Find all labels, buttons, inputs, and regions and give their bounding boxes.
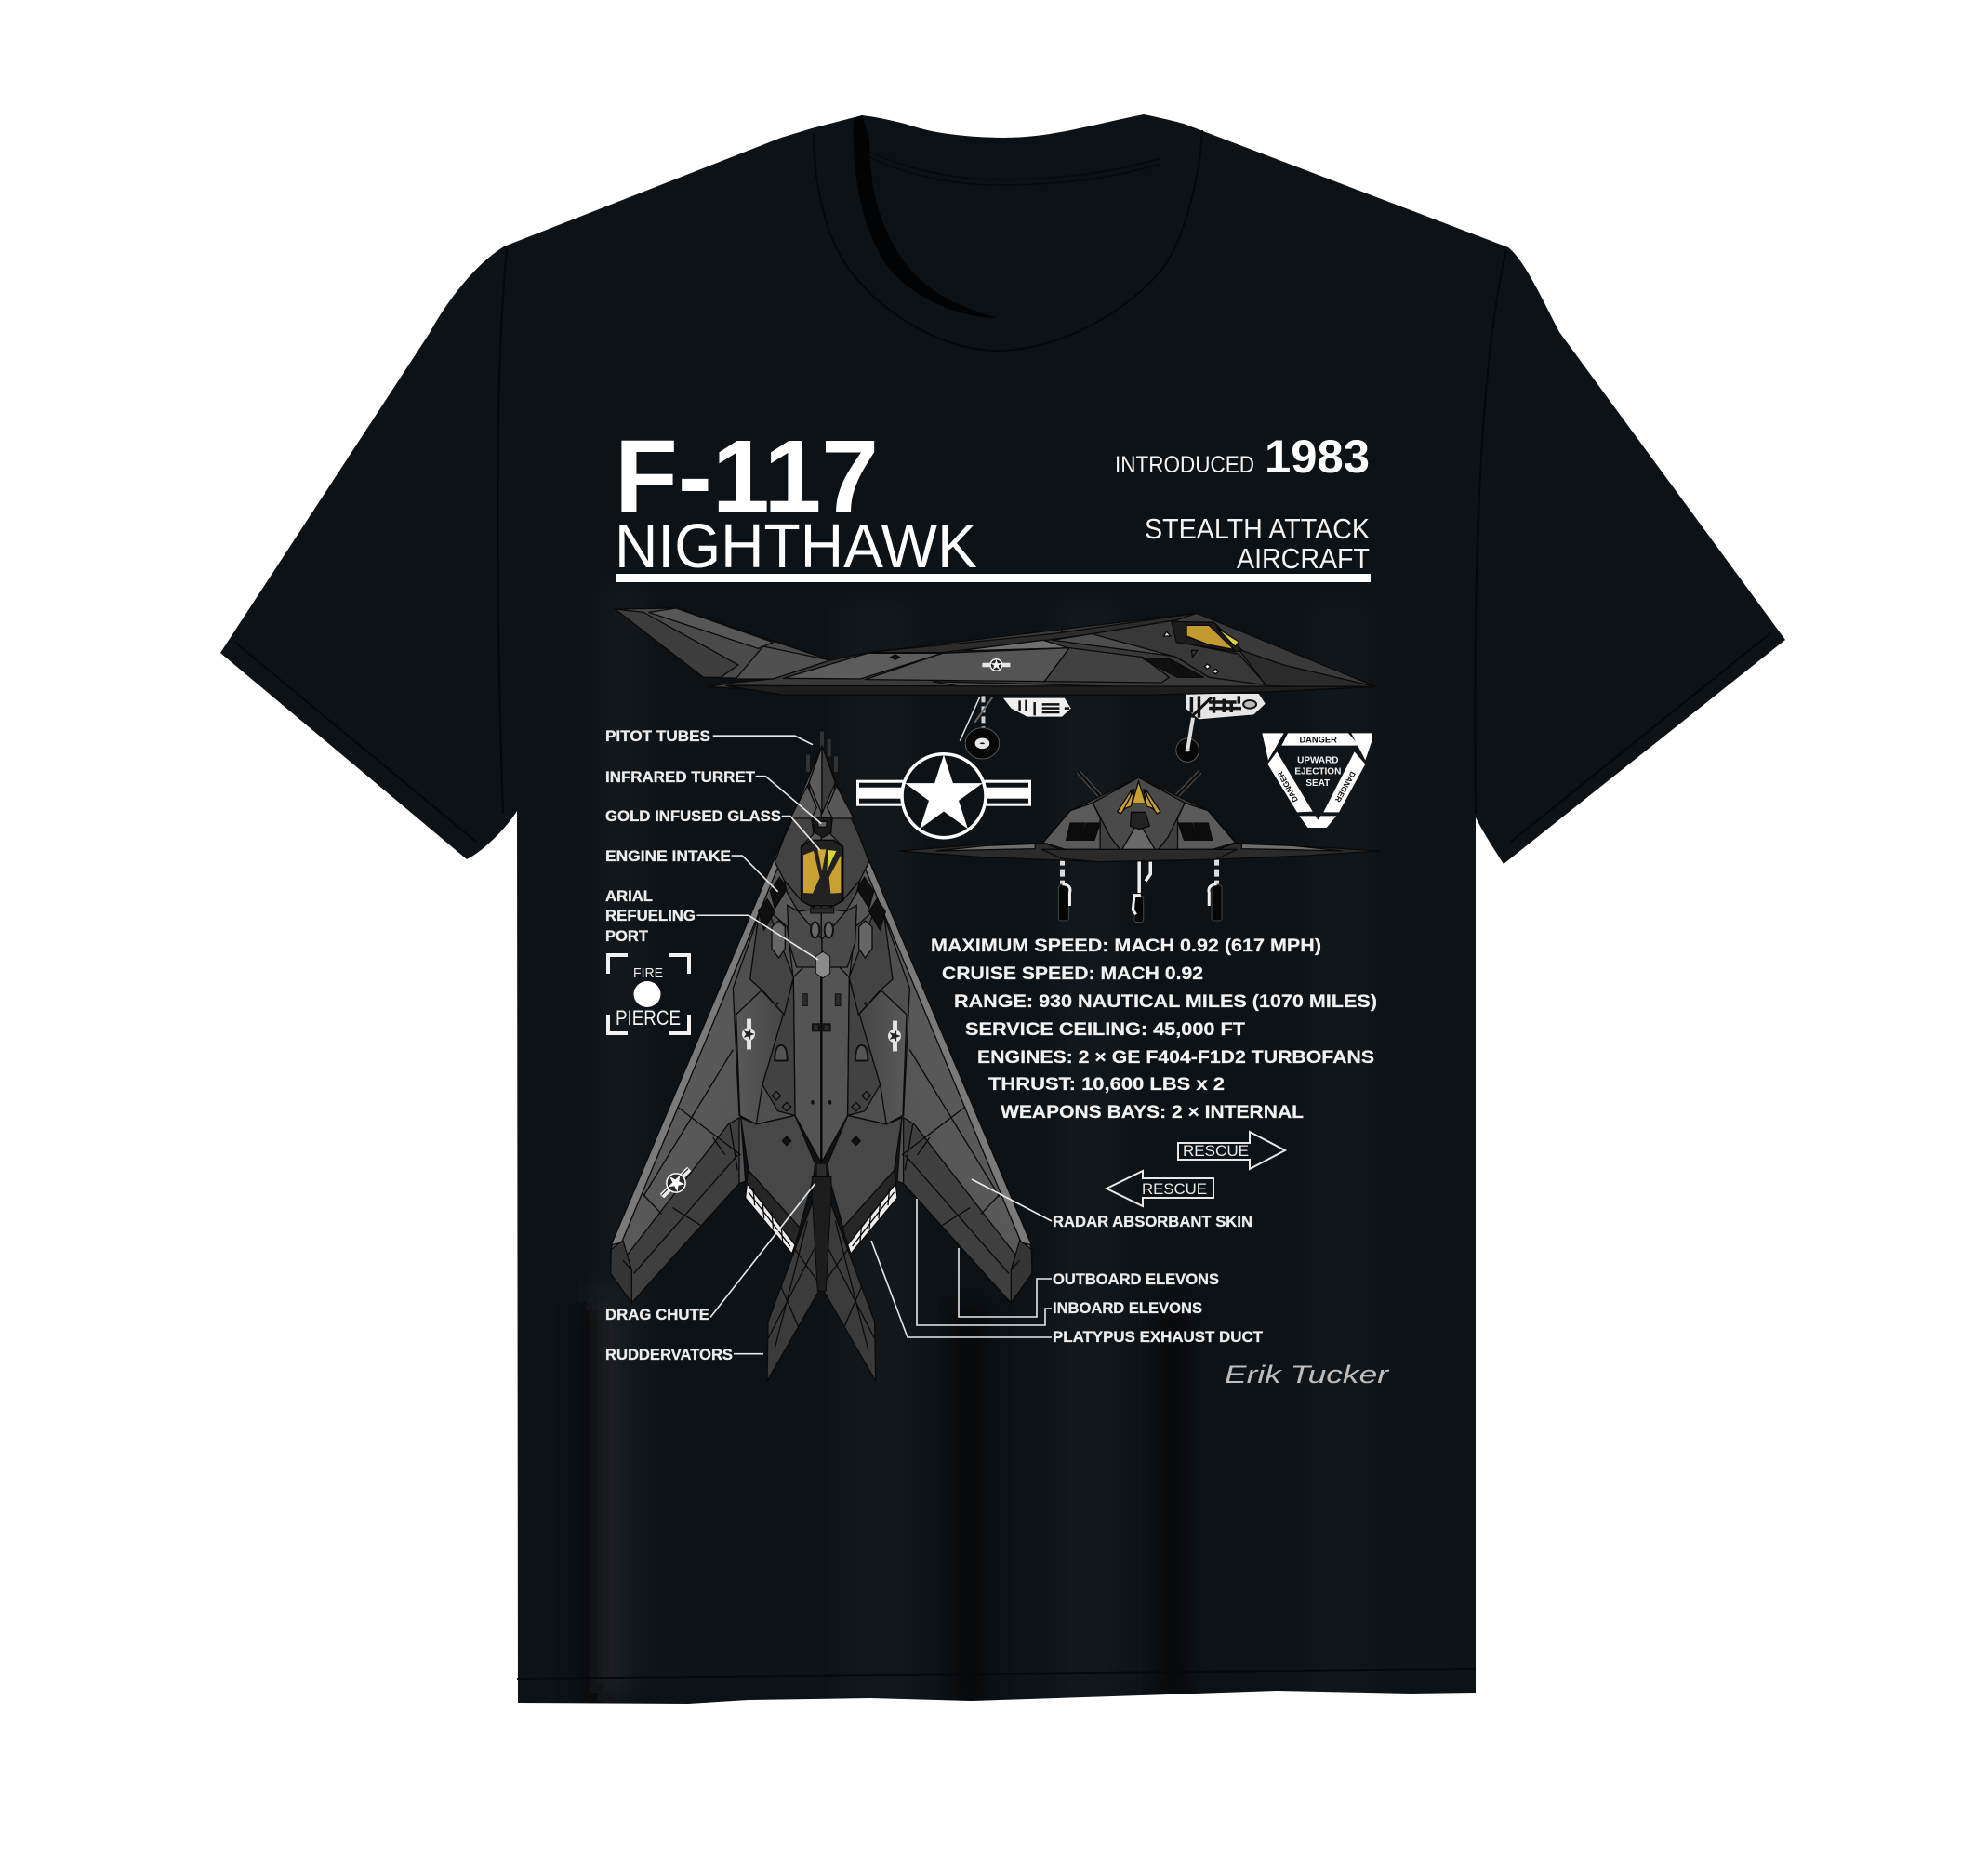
subtitle: STEALTH ATTACK: [1145, 512, 1370, 545]
subtitle: AIRCRAFT: [1237, 542, 1370, 575]
callout labels: right: INBOARD ELEVONS: [1053, 1299, 1202, 1317]
title: NIGHTHAWK: NIGHTHAWK: [615, 512, 977, 581]
callout labels: left: ARIAL: [605, 887, 653, 905]
callout labels: left: [605, 727, 781, 1363]
rescue arrow: left: RESCUE: [1142, 1180, 1207, 1198]
callout labels: left: REFUELING: [605, 907, 696, 924]
gold infused glass: [803, 849, 841, 894]
leader lines: left: [696, 736, 821, 1354]
infrared turret: [813, 817, 831, 838]
canopy frame: [802, 840, 843, 906]
callout labels: left: GOLD INFUSED GLASS: [605, 807, 781, 825]
canopy rear and refueling port: [811, 908, 834, 978]
introduced label: INTRODUCED: [1115, 452, 1254, 478]
t-shirt silhouette: [220, 114, 1785, 1711]
nose cone: [809, 746, 835, 814]
introduced year: 1983: [1265, 431, 1370, 483]
danger sign: upward ejection seat: UPWARD: [1297, 756, 1339, 766]
side view roundel: [982, 659, 1010, 671]
callout labels: left: PITOT TUBES: [605, 727, 710, 745]
top view roundel on wing: [656, 1162, 696, 1203]
danger sign: upward ejection seat: EJECTION: [1294, 767, 1341, 777]
rescue arrow: right: [1178, 1132, 1285, 1169]
callout labels: left: ENGINE INTAKE: [605, 847, 731, 865]
forward fuselage left panels: [759, 783, 822, 967]
leader lines: right: [871, 1179, 1052, 1337]
fire pierce marking: FIRE: [633, 965, 663, 981]
specifications text block: CRUISE SPEED: MACH 0.92: [942, 964, 1203, 984]
danger sign: upward ejection seat: DANGER: [1299, 735, 1337, 744]
danger sign: upward ejection seat: [1262, 733, 1372, 828]
title rule: [616, 574, 1371, 582]
ruddervator: [767, 1194, 819, 1381]
callout labels: left: PORT: [605, 927, 649, 945]
danger sign: upward ejection seat: DANGER: [1333, 770, 1358, 804]
danger sign: upward ejection seat: SEAT: [1305, 778, 1330, 789]
national insignia roundel: [856, 754, 1031, 838]
side view aircraft: [616, 608, 1376, 762]
fire pierce marking: [608, 955, 689, 1033]
small roundels on wing roots: [742, 1019, 901, 1051]
callout labels: right: [1053, 1213, 1264, 1346]
callout labels: right: RADAR ABSORBANT SKIN: [1053, 1213, 1252, 1230]
right forward panels mirrored: [822, 783, 885, 967]
front view aircraft: [899, 772, 1379, 923]
landing gear side: [960, 694, 1266, 762]
callout labels: right: PLATYPUS EXHAUST DUCT: [1053, 1328, 1264, 1346]
right half mirrored: [821, 747, 1032, 1381]
specifications text block: RANGE: 930 NAUTICAL MILES (1070 MILES): [954, 992, 1377, 1012]
surface details: [775, 1045, 788, 1060]
callout labels: left: DRAG CHUTE: [605, 1306, 709, 1323]
pitot probes: [808, 732, 836, 772]
specifications text block: [931, 937, 1377, 1123]
callout labels: right: OUTBOARD ELEVONS: [1053, 1270, 1219, 1288]
title: F-117: F-117: [615, 419, 879, 534]
subtitle: [1145, 512, 1370, 575]
specifications text block: WEAPONS BAYS: 2 × INTERNAL: [1001, 1103, 1304, 1123]
specifications text block: ENGINES: 2 × GE F404-F1D2 TURBOFANS: [977, 1048, 1374, 1068]
front landing gear: [1058, 857, 1222, 923]
exhaust slats: [746, 1170, 801, 1254]
wing and forward body base: [611, 747, 821, 1303]
fire pierce marking: PIERCE: [616, 1006, 681, 1030]
left half planform: [611, 747, 821, 1381]
specifications text block: SERVICE CEILING: 45,000 FT: [965, 1020, 1245, 1040]
center spine and boom: [812, 949, 831, 1291]
nose and cockpit detail: [759, 732, 885, 978]
top view aircraft: [611, 747, 1032, 1381]
fuselage side panels: [733, 905, 795, 1124]
rescue arrow: left: [1107, 1171, 1213, 1206]
callout labels: left: RUDDERVATORS: [605, 1346, 733, 1363]
specifications text block: THRUST: 10,600 LBS x 2: [988, 1075, 1225, 1095]
signature: Erik Tucker: [1225, 1361, 1389, 1388]
front fuselage panels: [899, 772, 1379, 862]
callout labels: left: INFRARED TURRET: [605, 768, 756, 786]
fuselage panels side: [616, 608, 1376, 695]
specifications text block: MAXIMUM SPEED: MACH 0.92 (617 MPH): [931, 937, 1321, 956]
danger sign: upward ejection seat: DANGER: [1276, 770, 1300, 804]
rescue arrow: right: RESCUE: [1183, 1142, 1249, 1160]
